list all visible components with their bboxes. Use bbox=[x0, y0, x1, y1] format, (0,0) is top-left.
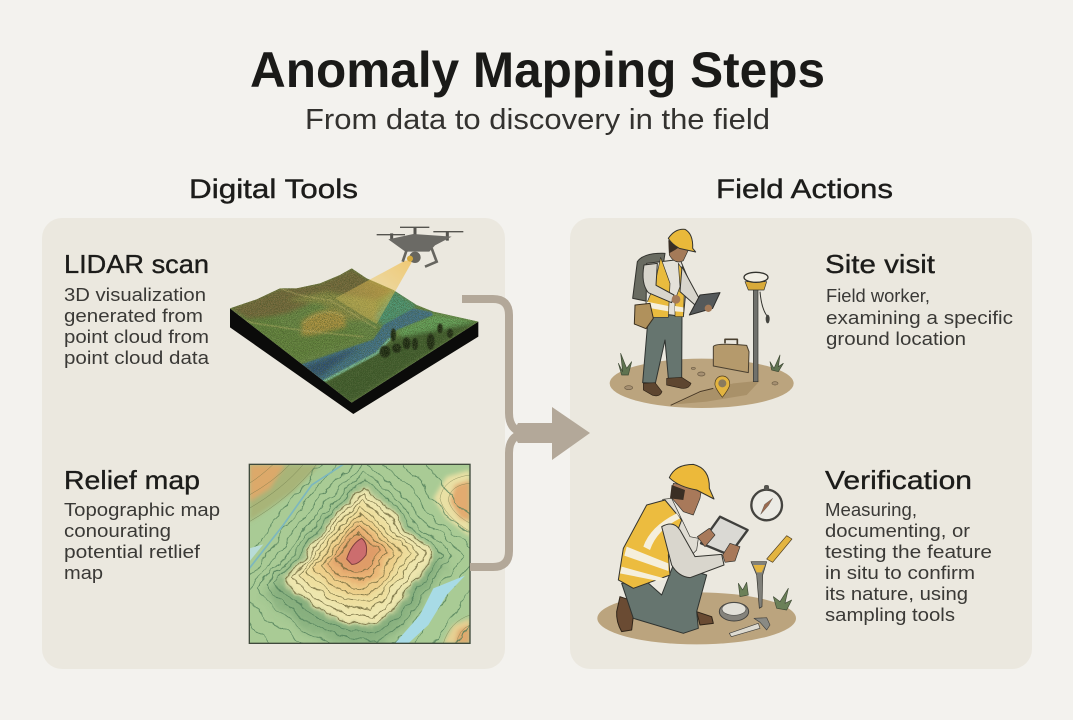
text block: Verification: Verification bbox=[825, 465, 972, 495]
boots bbox=[617, 597, 635, 632]
arm bbox=[662, 524, 724, 578]
legs bbox=[643, 315, 682, 383]
text block: Site visit: ground location bbox=[826, 328, 966, 349]
boots bbox=[643, 377, 691, 396]
map hill corners bbox=[249, 464, 470, 643]
text block: Relief map: conourating bbox=[64, 520, 171, 541]
text block: Verification: its nature, using bbox=[825, 583, 968, 604]
ground bbox=[610, 359, 794, 408]
terrain ridges bbox=[240, 288, 377, 337]
helmet bbox=[668, 229, 696, 252]
icon: drone bbox=[377, 227, 463, 267]
terrain sides bbox=[230, 308, 478, 414]
terrain point-cloud speckle bbox=[230, 268, 478, 402]
helmet bbox=[669, 464, 714, 499]
text block: LIDAR scan: generated from bbox=[64, 305, 203, 326]
illustration: site visit worker bbox=[610, 229, 794, 408]
grass bbox=[618, 353, 783, 375]
map contours peak bbox=[250, 465, 470, 643]
text block: Site visit: examining a specific bbox=[826, 307, 1013, 328]
pouch bbox=[634, 303, 653, 329]
text block: Relief map bbox=[64, 465, 220, 583]
text block: Site visit: Field worker, bbox=[826, 285, 930, 306]
river bbox=[295, 308, 433, 383]
tablet bbox=[701, 517, 748, 555]
collar and rear sleeve bbox=[663, 498, 698, 555]
measuring dish bbox=[719, 602, 749, 621]
text block: Verification: sampling tools bbox=[825, 604, 955, 625]
text block: Verification: testing the feature bbox=[825, 541, 992, 562]
trees bbox=[380, 323, 453, 358]
arms bbox=[643, 263, 674, 303]
text block: LIDAR scan: 3D visualization bbox=[64, 284, 206, 305]
ground stones bbox=[625, 367, 778, 390]
heading: Digital Tools: Digital Tools bbox=[189, 174, 358, 204]
arrow: merging connector bbox=[462, 299, 590, 567]
hands bbox=[697, 528, 740, 562]
title: Anomaly Mapping Steps bbox=[250, 42, 825, 98]
map rivers bbox=[249, 464, 343, 568]
text block: LIDAR scan: point cloud from bbox=[64, 326, 209, 347]
text block: Relief map: map bbox=[64, 562, 103, 583]
legs bbox=[622, 565, 707, 633]
gps pole bbox=[753, 288, 758, 382]
text block: LIDAR scan bbox=[64, 249, 210, 368]
vest bbox=[645, 257, 685, 317]
heading: Field Actions: Field Actions bbox=[716, 174, 893, 204]
text block: Site visit bbox=[825, 249, 1013, 349]
map corner contours bbox=[249, 464, 470, 643]
tool case bbox=[725, 339, 737, 345]
torso bbox=[646, 259, 687, 317]
hammer bbox=[729, 623, 760, 637]
vest bbox=[618, 500, 682, 588]
location pin bbox=[715, 376, 730, 397]
text block: Relief map: Relief map bbox=[64, 465, 200, 495]
subtitle: From data to discovery in the field bbox=[305, 104, 770, 136]
sampling probe bbox=[751, 562, 767, 608]
ground bbox=[597, 592, 796, 644]
illustration: LIDAR terrain block with drone bbox=[220, 227, 487, 414]
relief map bbox=[248, 464, 471, 644]
head bbox=[671, 483, 702, 515]
text block: Verification: documenting, or bbox=[825, 520, 970, 541]
text block: Relief map: Topographic map bbox=[64, 499, 220, 520]
text block: LIDAR scan: point cloud data bbox=[64, 347, 210, 368]
text block: Verification bbox=[825, 465, 992, 625]
text block: Site visit: Site visit bbox=[825, 249, 936, 279]
panel: Digital Tools bbox=[42, 218, 505, 669]
grass bbox=[738, 582, 792, 610]
compass bbox=[751, 490, 782, 520]
tablet bbox=[689, 293, 720, 315]
text block: Relief map: potential retlief bbox=[64, 541, 201, 562]
panel: Field Actions bbox=[570, 218, 1032, 669]
text block: Verification: in situ to confirm bbox=[825, 562, 975, 583]
scan beam bbox=[335, 261, 413, 324]
text block: Verification: Measuring, bbox=[825, 499, 917, 520]
terrain surface bbox=[230, 268, 478, 402]
illustration: verification worker bbox=[597, 464, 796, 644]
hillshade under contours bbox=[265, 481, 448, 649]
head bbox=[669, 243, 688, 262]
text block: LIDAR scan: LIDAR scan bbox=[64, 249, 209, 279]
backpack bbox=[633, 253, 665, 303]
